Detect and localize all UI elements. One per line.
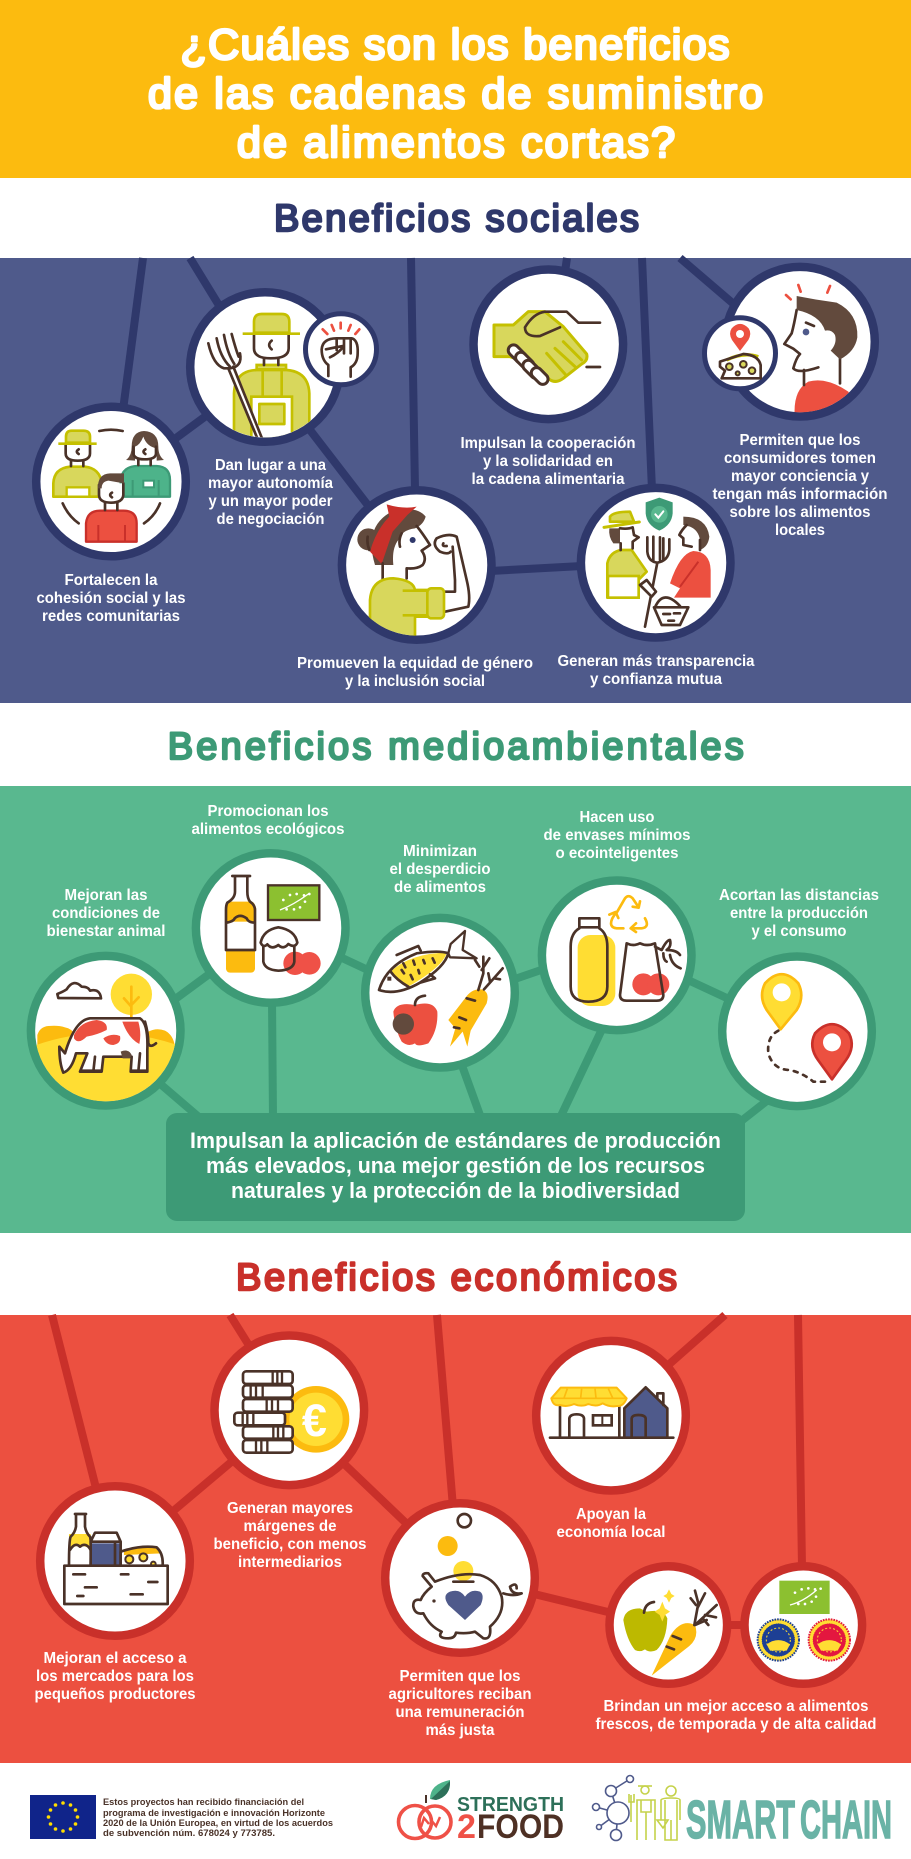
icon: organic food products — [196, 853, 346, 1003]
text: food waste: Minimizan — [403, 843, 477, 860]
icon: community group — [36, 407, 186, 556]
icon: raised fist badge — [306, 314, 376, 385]
text: food waste: de alimentos — [394, 879, 486, 896]
title — [148, 21, 763, 167]
text: animal welfare: bienestar animal — [46, 923, 166, 940]
title: de las cadenas de suministro — [148, 70, 763, 118]
text: profit margins: márgenes de — [244, 1518, 337, 1535]
text: profit margins: Generan mayores — [227, 1500, 353, 1517]
text: transparency: y confianza mutua — [590, 671, 722, 688]
text: organic food — [192, 803, 345, 838]
callout: standards: naturales y la protección de la biodiversidad — [231, 1178, 680, 1203]
panel: environmental benefits — [0, 786, 911, 1233]
text: fair pay: Permiten que los — [400, 1668, 521, 1685]
text: autonomy: y un mayor poder — [208, 493, 332, 510]
text: organic food: alimentos ecológicos — [192, 821, 345, 838]
callout: standards: más elevados, una mejor gestión de los recursos — [206, 1153, 705, 1178]
icon: EU flag — [30, 1795, 96, 1839]
icon: fish, apple and carrot — [365, 918, 515, 1068]
text: distances: entre la producción — [730, 905, 868, 922]
text: awareness: consumidores tomen — [724, 450, 876, 467]
text: market access: los mercados para los — [36, 1668, 194, 1685]
header band — [0, 0, 911, 178]
text: market access: Mejoran el acceso a — [44, 1650, 187, 1667]
text: cooperation: la cadena alimentaria — [472, 471, 625, 488]
text: awareness — [712, 432, 888, 539]
text: local economy: economía local — [556, 1524, 666, 1541]
text: funding note: programa de investigación e innovación Horizonte — [103, 1808, 325, 1819]
text: autonomy: Dan lugar a una — [215, 457, 326, 474]
icon: eco packaging — [542, 880, 692, 1030]
heading: social benefits: Beneficios sociales — [274, 198, 639, 240]
icon: farmer with pitchfork — [190, 292, 340, 442]
text: autonomy: mayor autonomía — [208, 475, 333, 492]
icon: farmer and customer with shield — [581, 488, 730, 638]
icon: quality labels — [744, 1566, 862, 1684]
text: transparency: Generan más transparencia — [558, 653, 755, 670]
text: cooperation: Impulsan la cooperación — [460, 435, 636, 452]
heading: environmental benefits: Beneficios medioambientales — [168, 726, 744, 768]
icon: informed consumer — [725, 267, 875, 420]
text: packaging: de envases mínimos — [544, 827, 691, 844]
text: awareness: locales — [775, 522, 825, 539]
text: cooperation — [460, 435, 636, 488]
text: funding note: 2020 de la Unión Europea, en virtud de los acuerdos — [103, 1818, 333, 1829]
title: ¿Cuáles son los beneficios — [180, 21, 730, 69]
logo: SmartChain: SMART — [686, 1790, 795, 1850]
text: gender equity — [297, 655, 533, 690]
panel: social benefits — [0, 258, 911, 703]
text: community cohesion: cohesión social y las — [36, 590, 186, 607]
text: gender equity: Promueven la equidad de género — [297, 655, 533, 672]
text: cooperation: y la solidaridad en — [483, 453, 613, 470]
text: autonomy — [208, 457, 333, 528]
text: distances: Acortan las distancias — [719, 887, 879, 904]
logo: Strength2Food — [398, 1780, 564, 1846]
icon: fresh pepper and carrot — [610, 1566, 727, 1684]
title: de alimentos cortas? — [237, 119, 675, 167]
text: local economy: Apoyan la — [576, 1506, 646, 1523]
text: fair pay — [388, 1668, 532, 1739]
text: autonomy: de negociación — [216, 511, 324, 528]
text: animal welfare: Mejoran las — [64, 887, 148, 904]
footer — [30, 1776, 892, 1850]
text: packaging — [544, 809, 691, 862]
icon: woman showing strength — [342, 490, 492, 640]
text: animal welfare — [46, 887, 166, 940]
connector lines: economic — [52, 1315, 802, 1625]
text: fresh food: frescos, de temporada y de alta calidad — [596, 1716, 876, 1733]
text: community cohesion: redes comunitarias — [42, 608, 180, 625]
text: fair pay: una remuneración — [396, 1704, 524, 1721]
icon: piggy bank — [385, 1503, 535, 1653]
logo: Strength2Food: 2 — [457, 1808, 476, 1846]
icon: map pins and route — [722, 957, 872, 1106]
text: community cohesion: Fortalecen la — [64, 572, 158, 589]
text: profit margins — [214, 1500, 367, 1571]
text: fair pay: más justa — [426, 1722, 495, 1739]
text: profit margins: intermediarios — [238, 1554, 342, 1571]
panel: economic benefits — [0, 1315, 911, 1763]
connector lines: environmental — [158, 957, 768, 1122]
icon: coins and euro: € — [302, 1395, 327, 1446]
logo: SmartChain — [592, 1776, 892, 1850]
text: market access — [34, 1650, 196, 1703]
text: fresh food: Brindan un mejor acceso a alimentos — [604, 1698, 869, 1715]
callout: standards — [166, 1113, 745, 1221]
logo: Strength2Food: FOOD — [477, 1808, 564, 1846]
icon: coins and euro — [214, 1336, 364, 1485]
text: awareness: tengan más información — [712, 486, 888, 503]
text: awareness: Permiten que los — [740, 432, 861, 449]
text: awareness: sobre los alimentos — [730, 504, 871, 521]
text: food waste: el desperdicio — [390, 861, 491, 878]
text: organic food: Promocionan los — [208, 803, 329, 820]
connector lines: social — [123, 258, 736, 571]
text: food waste — [390, 843, 491, 896]
text: funding note: de subvención núm. 678024 y 773785. — [103, 1828, 275, 1839]
icon: located cheese badge — [704, 318, 776, 389]
text: transparency — [558, 653, 755, 688]
text: funding note — [103, 1797, 333, 1839]
text: gender equity: y la inclusión social — [345, 673, 485, 690]
text: awareness: mayor conciencia y — [731, 468, 869, 485]
text: local economy — [556, 1506, 666, 1541]
text: funding note: Estos proyectos han recibido financiación del — [103, 1797, 304, 1808]
text: fresh food — [596, 1698, 876, 1733]
text: distances: y el consumo — [752, 923, 847, 940]
logo: Strength2Food: STRENGTH — [457, 1794, 564, 1816]
text: market access: pequeños productores — [34, 1686, 196, 1703]
text: packaging: o ecointeligentes — [556, 845, 679, 862]
icon: handshake — [474, 270, 623, 419]
callout: standards: Impulsan la aplicación de estándares de producción — [190, 1128, 721, 1153]
text: animal welfare: condiciones de — [52, 905, 160, 922]
icon: local shop and house — [536, 1341, 686, 1490]
text: fair pay: agricultores reciban — [388, 1686, 532, 1703]
text: packaging: Hacen uso — [580, 809, 655, 826]
text: distances — [719, 887, 879, 940]
icon: market crate — [40, 1486, 190, 1636]
heading: economic benefits: Beneficios económicos — [236, 1257, 677, 1299]
text: community cohesion — [36, 572, 186, 625]
text: profit margins: beneficio, con menos — [214, 1536, 367, 1553]
icon: grazing cow — [31, 956, 180, 1107]
